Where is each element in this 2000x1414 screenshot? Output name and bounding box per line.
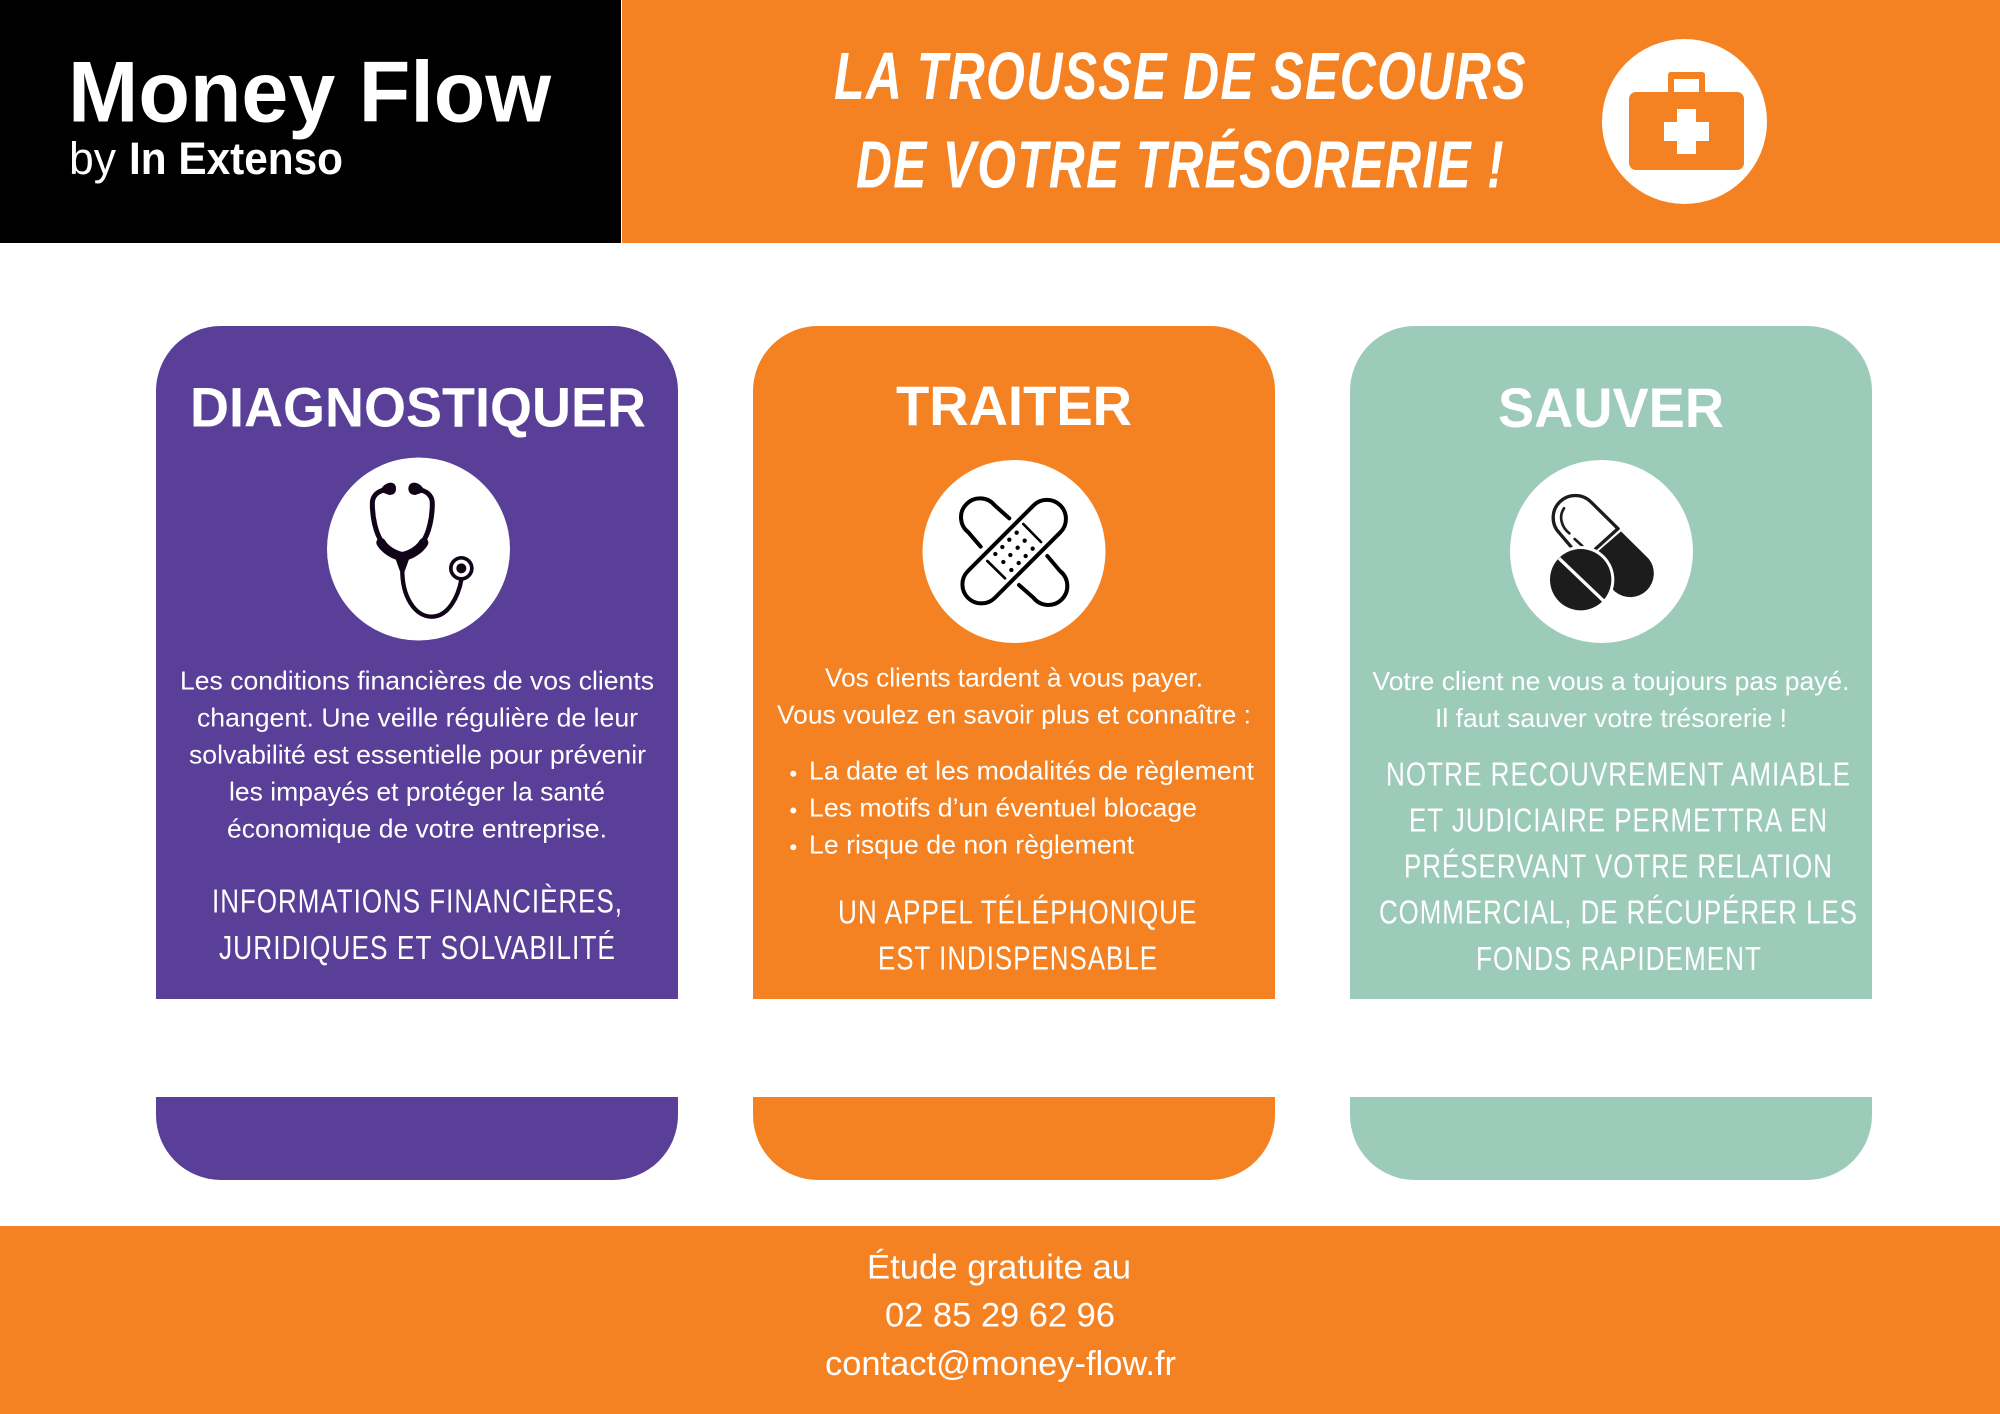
text block: sauver callout: COMMERCIAL, DE RÉCUPÉRER LES	[1379, 895, 1858, 932]
text block: traiter callout: UN APPEL TÉLÉPHONIQUE	[838, 895, 1198, 932]
logo: by In Extenso: by	[69, 133, 116, 184]
bullet list: traiter	[790, 756, 1255, 860]
text block: sauver description: Il faut sauver votre trésorerie !	[1435, 703, 1787, 733]
text block: traiter description: Vous voulez en savoir plus et connaître :	[777, 699, 1251, 729]
heading: traiter: TRAITER	[896, 375, 1132, 437]
title	[834, 39, 1527, 203]
text block: diagnostiquer description: changent. Une veille régulière de leur	[197, 703, 638, 733]
text block: traiter description: Vos clients tardent à vous payer.	[825, 663, 1203, 693]
text block: diagnostiquer description: les impayés et protéger la santé	[229, 777, 605, 807]
footer text: email: contact@money-flow.fr	[825, 1345, 1176, 1383]
header title band	[622, 0, 2000, 243]
text block: diagnostiquer description	[180, 665, 654, 844]
text block: sauver callout: NOTRE RECOUVREMENT AMIABLE	[1386, 756, 1851, 793]
text block: traiter description	[777, 663, 1251, 729]
icon: first aid kit	[1602, 39, 1767, 204]
bullet list: traiter: Le risque de non règlement	[809, 830, 1135, 860]
text block: diagnostiquer description: solvabilité est essentielle pour prévenir	[189, 740, 646, 770]
panel: traiter	[753, 326, 1275, 999]
header logo block	[0, 0, 621, 243]
bullet list: traiter: Les motifs d’un éventuel blocage	[809, 793, 1197, 823]
logo: Money Flow: Money Flow	[68, 45, 552, 141]
heading: sauver: SAUVER	[1498, 377, 1724, 439]
text block: traiter callout: EST INDISPENSABLE	[878, 941, 1158, 978]
logo: by In Extenso: In Extenso	[129, 133, 343, 184]
footer contact band	[0, 1226, 2000, 1414]
text block: sauver callout: ET JUDICIAIRE PERMETTRA EN	[1409, 803, 1828, 840]
icon: stethoscope	[327, 458, 510, 640]
footer text: phone number: 02 85 29 62 96	[885, 1297, 1115, 1335]
panel foot: diagnostiquer	[156, 1097, 678, 1180]
panel foot: sauver	[1350, 1097, 1872, 1180]
panel: diagnostiquer	[156, 326, 678, 999]
icon: bandages	[922, 460, 1106, 643]
text block: sauver callout: PRÉSERVANT VOTRE RELATION	[1404, 849, 1833, 886]
panel foot: traiter	[753, 1097, 1275, 1180]
title: LA TROUSSE DE SECOURS	[834, 39, 1527, 114]
text block: diagnostiquer callout: INFORMATIONS FINANCIÈRES,	[212, 883, 623, 920]
text block: traiter callout	[838, 895, 1198, 978]
text block: sauver callout	[1379, 756, 1858, 978]
heading: diagnostiquer: DIAGNOSTIQUER	[190, 377, 646, 439]
text block: diagnostiquer description: économique de votre entreprise.	[227, 814, 607, 844]
text block: diagnostiquer callout: JURIDIQUES ET SOLVABILITÉ	[219, 930, 616, 967]
title: DE VOTRE TRÉSORERIE !	[856, 128, 1505, 203]
panel: sauver	[1350, 326, 1872, 999]
bullet list: traiter: La date et les modalités de règlement	[809, 756, 1255, 786]
text block: sauver callout: FONDS RAPIDEMENT	[1476, 941, 1762, 978]
text block: diagnostiquer description: Les conditions financières de vos clients	[180, 665, 654, 695]
footer text: study offer: Étude gratuite au	[867, 1247, 1131, 1286]
text block: sauver description: Votre client ne vous a toujours pas payé.	[1372, 666, 1850, 696]
text block: sauver description	[1372, 666, 1850, 733]
icon: pills	[1510, 460, 1693, 643]
text block: diagnostiquer callout	[212, 883, 623, 967]
